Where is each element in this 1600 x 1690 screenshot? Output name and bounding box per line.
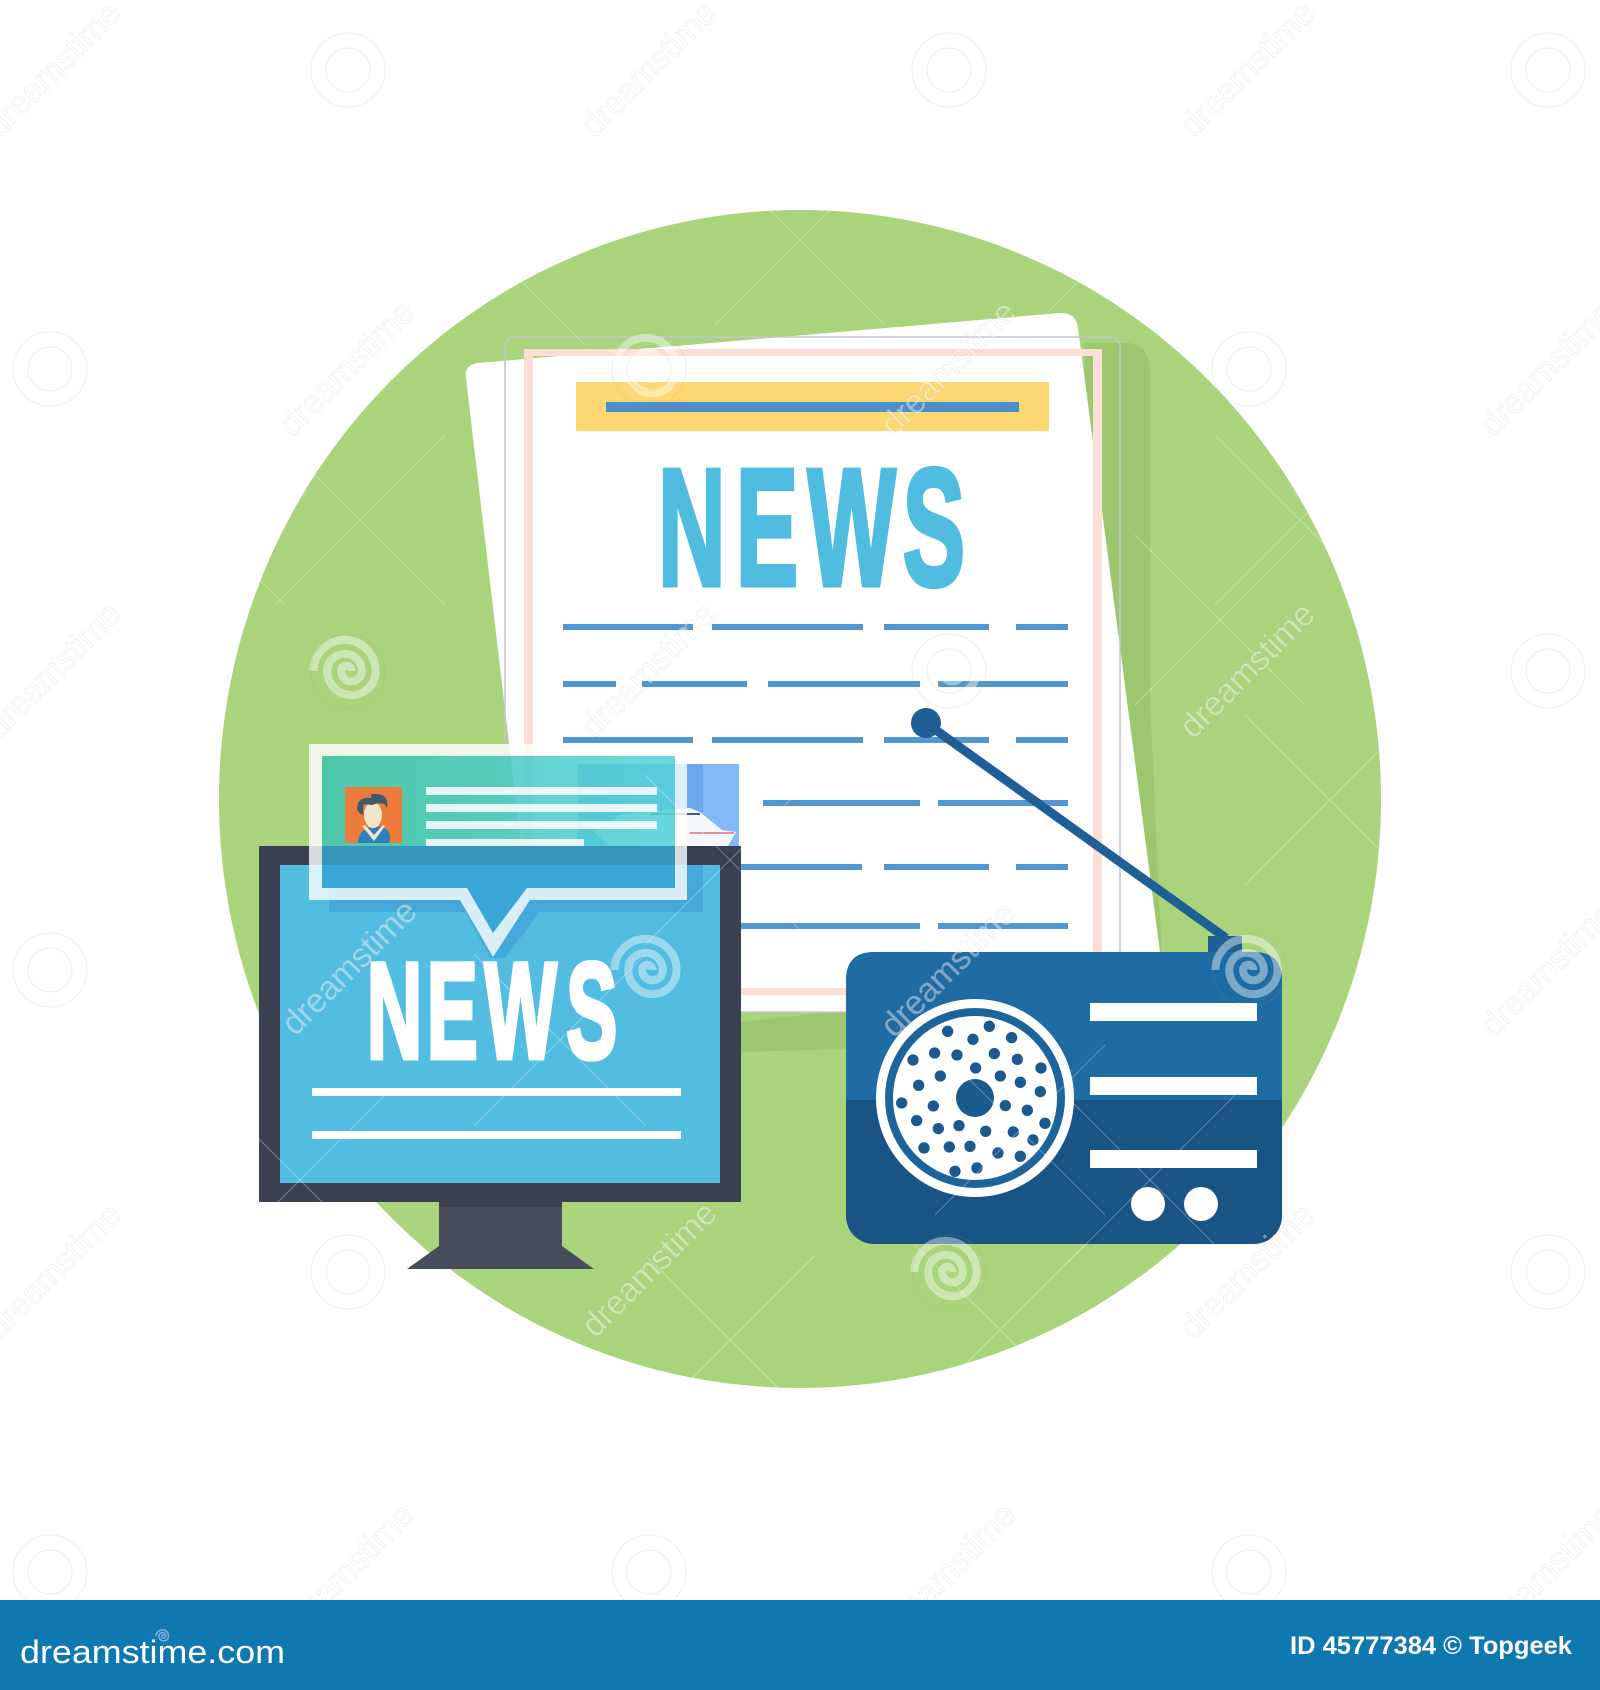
watermark crosses — [115, 155, 1415, 1425]
watermark text: dreamstime — [1172, 1196, 1323, 1347]
monitor NEWS title: NEWS — [367, 933, 617, 1088]
watermark text: dreamstime — [873, 293, 1024, 444]
bubble body — [322, 756, 675, 933]
footer logo text: dreamstime.com — [20, 1634, 285, 1670]
footer credit text: ID 45777384 © Topgeek — [1290, 1632, 1572, 1660]
panel: speech bubble — [309, 744, 687, 957]
watermark text: dreamstime — [573, 595, 724, 746]
watermark text: dreamstime — [1172, 595, 1323, 746]
radio body — [846, 952, 1282, 1244]
watermark text: dreamstime — [271, 293, 422, 444]
radio antenna — [911, 708, 1242, 954]
monitor text lines — [312, 1088, 681, 1139]
watermark text: dreamstime — [873, 1496, 1024, 1647]
paper drop shadow — [741, 343, 1162, 1052]
panel: radio — [846, 708, 1282, 1244]
yellow headline banner — [576, 382, 1049, 431]
panel: monitor — [259, 846, 741, 1269]
watermark text: dreamstime — [574, 1194, 725, 1345]
icon: person avatar — [345, 787, 402, 843]
article text lines — [563, 624, 1068, 929]
monitor stand — [407, 1200, 594, 1269]
speaker holes — [896, 1021, 1051, 1177]
watermark text: dreamstime — [274, 892, 425, 1043]
bubble text lines — [426, 787, 657, 846]
radio speaker — [876, 999, 1074, 1197]
icon: footer logo spiral — [156, 1629, 170, 1643]
grey page outline — [505, 337, 1120, 1012]
radio knobs — [1131, 1187, 1218, 1221]
panel: newspaper — [466, 313, 1162, 1052]
bubble shadow — [329, 865, 703, 958]
photo with cruise ship — [578, 764, 739, 846]
back sheet and page — [466, 313, 1160, 1012]
pink page outline — [524, 349, 1102, 995]
radio tuning bars — [1090, 1003, 1257, 1168]
green background circle — [219, 210, 1381, 1388]
bubble frame — [309, 744, 687, 957]
footer band — [0, 1600, 1600, 1690]
watermark text: dreamstime — [873, 894, 1024, 1045]
newspaper NEWS title: NEWS — [658, 433, 965, 621]
monitor screen — [280, 865, 720, 1183]
monitor frame — [259, 846, 741, 1207]
watermark text: dreamstime — [271, 1496, 422, 1647]
